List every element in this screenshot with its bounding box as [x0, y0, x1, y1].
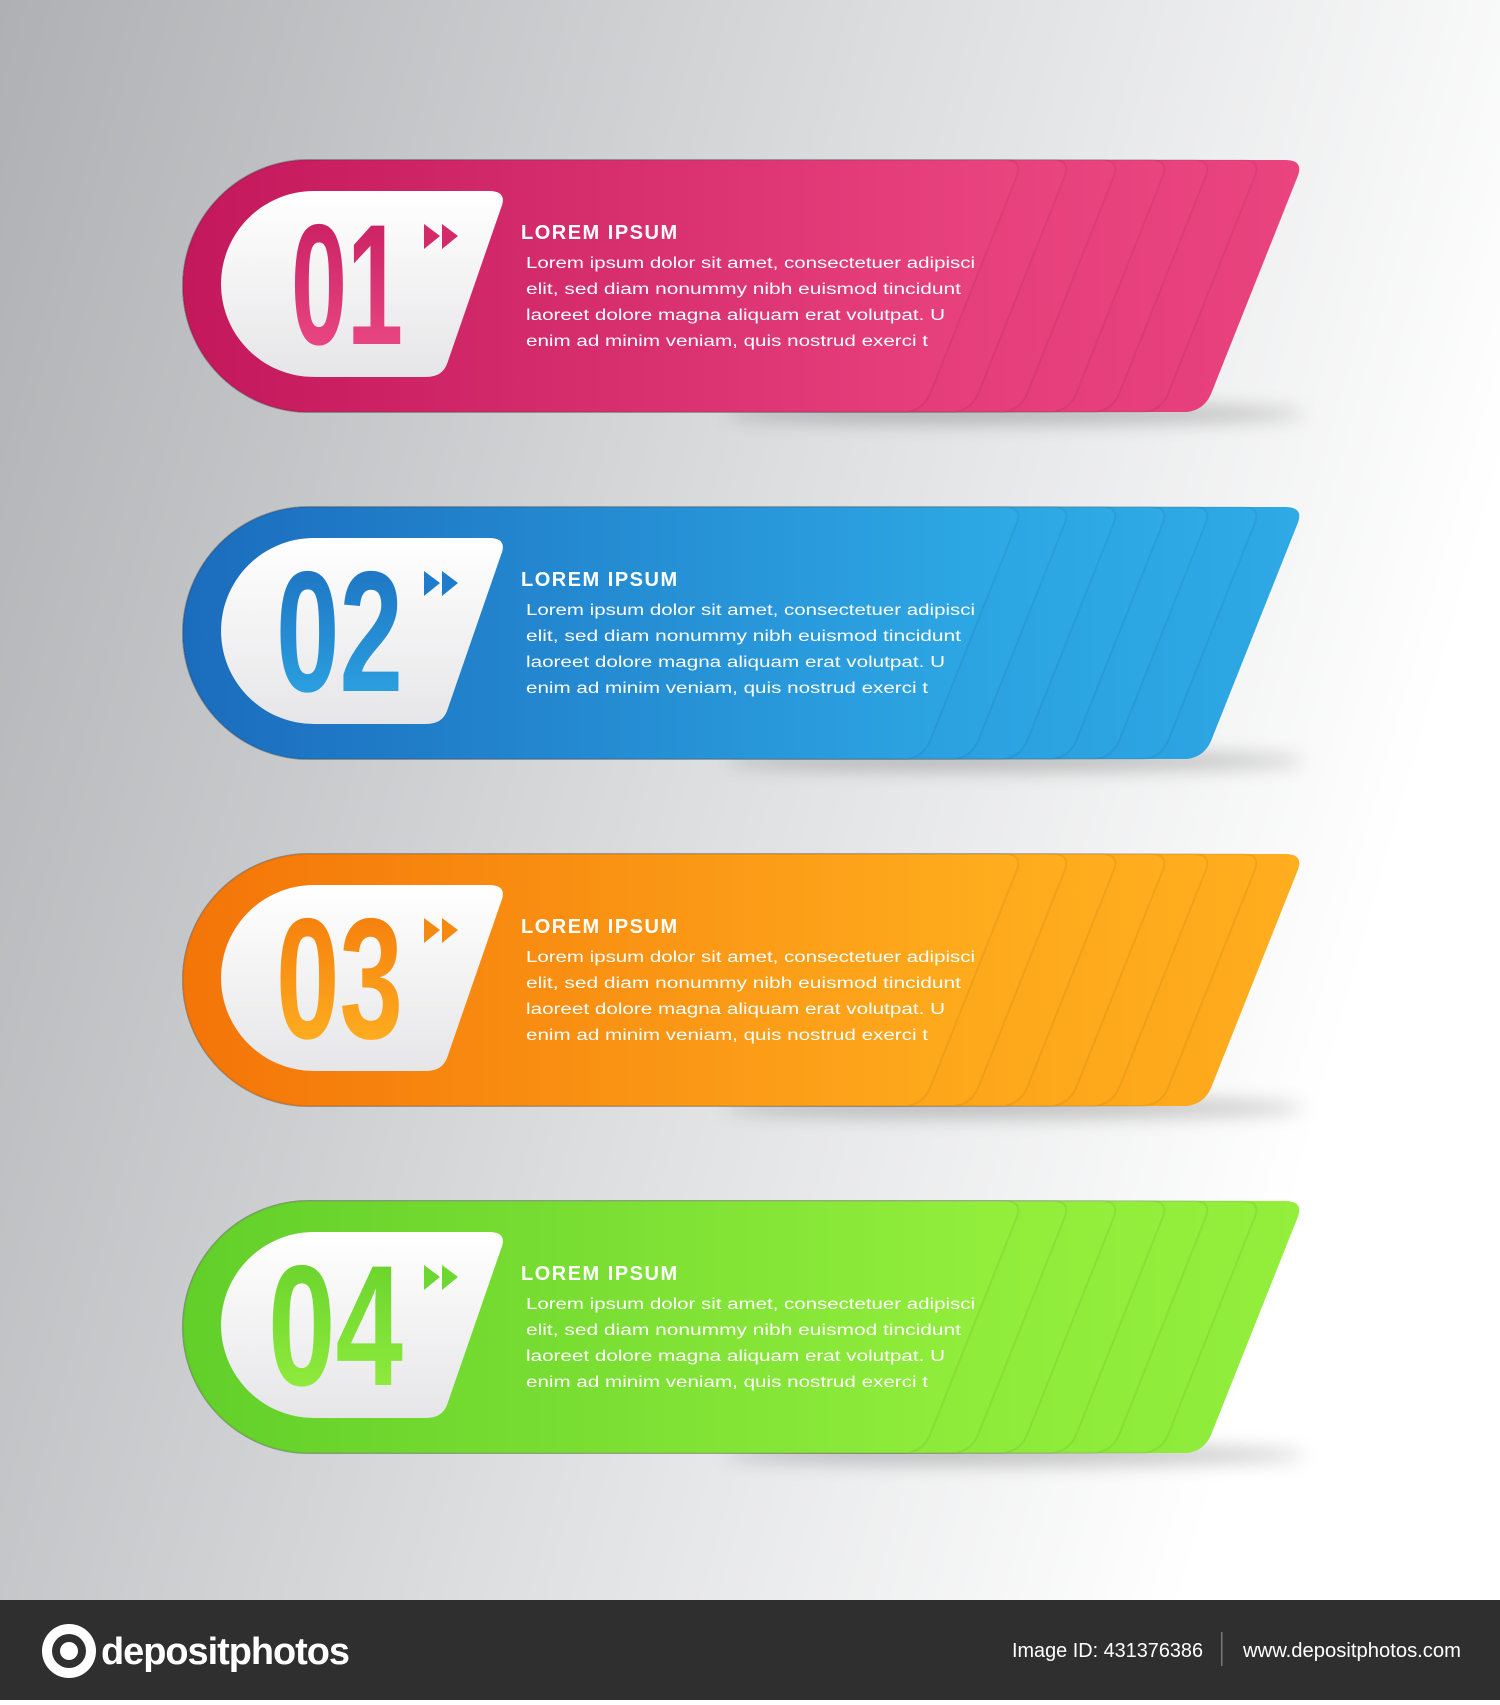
text block 1: laoreet dolore magna aliquam erat volutpat. U — [526, 307, 945, 324]
text block 3: LOREM IPSUM — [521, 916, 679, 938]
icon: arrows — [424, 224, 458, 249]
text block 4 — [521, 1263, 975, 1391]
number 02: 02 — [276, 536, 403, 728]
icon: arrows — [424, 1265, 458, 1290]
text block 3: laoreet dolore magna aliquam erat volutpat. U — [526, 1001, 945, 1018]
text block 4: laoreet dolore magna aliquam erat volutpat. U — [526, 1348, 945, 1365]
text block 1: LOREM IPSUM — [521, 222, 679, 244]
banner 2 — [183, 507, 1304, 771]
text block 3: elit, sed diam nonummy nibh euismod tincidunt — [526, 975, 962, 992]
banner 3 — [183, 854, 1304, 1118]
image id: Image ID: 431376386 — [1012, 1640, 1203, 1662]
icon: arrows — [424, 918, 458, 943]
icon: arrows — [424, 571, 458, 596]
text block 4: LOREM IPSUM — [521, 1263, 679, 1285]
number 04: 04 — [268, 1230, 403, 1422]
text block 1 — [521, 222, 975, 350]
banner 4 — [183, 1201, 1304, 1465]
text block 1: enim ad minim veniam, quis nostrud exerci t — [526, 333, 929, 350]
logo text: depositphotos — [101, 1631, 349, 1673]
text block 3: Lorem ipsum dolor sit amet, consectetuer adipisci — [526, 949, 975, 966]
text block 3 — [521, 916, 975, 1044]
text block 4: Lorem ipsum dolor sit amet, consectetuer adipisci — [526, 1296, 975, 1313]
footer bar — [0, 1600, 1500, 1700]
text block 4: enim ad minim veniam, quis nostrud exerci t — [526, 1374, 929, 1391]
number 03: 03 — [276, 883, 403, 1075]
text block 1: elit, sed diam nonummy nibh euismod tincidunt — [526, 281, 962, 298]
number 01: 01 — [291, 189, 403, 381]
text block 2: laoreet dolore magna aliquam erat volutpat. U — [526, 654, 945, 671]
logo icon — [42, 1624, 96, 1678]
text block 2: LOREM IPSUM — [521, 569, 679, 591]
banner 1 — [183, 160, 1304, 424]
text block 2 — [521, 569, 975, 697]
text block 2: enim ad minim veniam, quis nostrud exerci t — [526, 680, 929, 697]
text block 3: enim ad minim veniam, quis nostrud exerci t — [526, 1027, 929, 1044]
text block 2: elit, sed diam nonummy nibh euismod tincidunt — [526, 628, 962, 645]
text block 1: Lorem ipsum dolor sit amet, consectetuer adipisci — [526, 255, 975, 272]
text block 4: elit, sed diam nonummy nibh euismod tincidunt — [526, 1322, 962, 1339]
text block 2: Lorem ipsum dolor sit amet, consectetuer adipisci — [526, 602, 975, 619]
website: www.depositphotos.com — [1242, 1640, 1461, 1662]
